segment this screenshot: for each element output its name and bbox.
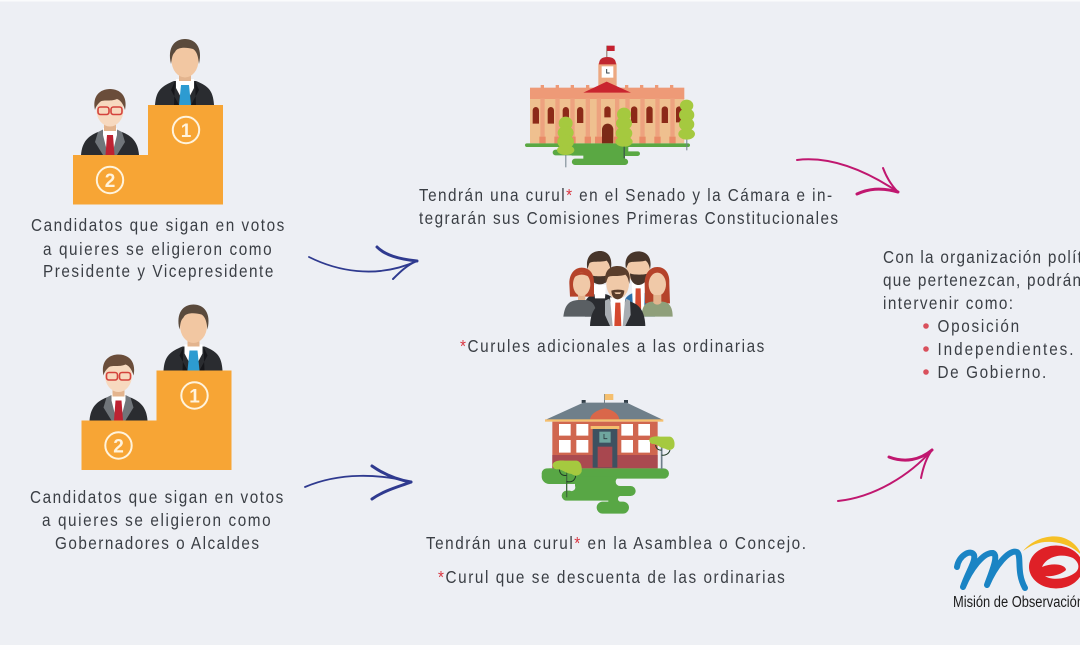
chimneys [582, 400, 628, 403]
windows [559, 424, 650, 453]
text: candidates president: Presidente y Vicepresidente [43, 261, 273, 281]
text: senate seat: tegrarán sus Comisiones Primeras Constitucionales [419, 208, 838, 228]
roof [545, 403, 663, 420]
text: candidates governors: Gobernadores o Alcaldes [55, 533, 259, 553]
tower [598, 63, 617, 87]
right woman [642, 267, 673, 317]
door [593, 428, 617, 468]
list: options: Oposición [938, 316, 1019, 336]
number 1: 1 [189, 386, 200, 408]
back right man [624, 251, 655, 317]
text: political organization: que pertenezcan, podrán [883, 270, 1080, 290]
text: candidates governors: Candidatos que sigan en votos [30, 487, 283, 507]
list: options [923, 316, 1074, 382]
podium group: governors and mayors [82, 304, 232, 470]
left woman [563, 268, 597, 317]
windows [533, 106, 682, 124]
pilasters [540, 98, 675, 137]
trees [557, 100, 695, 167]
flag [603, 394, 606, 409]
icon: school building [542, 394, 675, 514]
front man [590, 266, 645, 326]
walls [552, 422, 658, 468]
parapet [541, 85, 673, 88]
number 1: 1 [181, 121, 192, 142]
lawn [525, 143, 690, 165]
text: assembly seat: *Curul que se descuenta de las ordinarias [438, 567, 785, 587]
right tree [649, 436, 675, 469]
wall [530, 98, 684, 143]
text: candidates president: Candidatos que sigan en votos [31, 215, 284, 235]
text: candidates president: a quieres se eligieron como [43, 239, 272, 259]
text: assembly seat [426, 533, 806, 587]
logo: MOE [953, 536, 1080, 611]
icon: capitol building [525, 46, 695, 167]
back left man [585, 251, 615, 317]
text: candidates governors: a quieres se eligieron como [42, 510, 271, 530]
lawn [542, 468, 669, 514]
flag [605, 46, 608, 57]
text: senate seat [419, 185, 838, 228]
icon: group of people [563, 251, 673, 326]
text: assembly seat: Tendrán una curul* en la Asamblea o Concejo. [426, 533, 806, 553]
list: options: De Gobierno. [938, 362, 1046, 382]
logo mark [957, 536, 1080, 588]
arrow: magenta top [797, 159, 898, 194]
text: senate seat: Tendrán una curul* en el Senado y la Cámara e in- [419, 185, 832, 205]
arrow: blue bottom [305, 466, 411, 499]
text: political organization [883, 247, 1080, 382]
text: candidates president [31, 215, 284, 281]
text: political organization: intervenir como: [883, 293, 1013, 313]
list: options: Independientes. [938, 339, 1074, 359]
number 2: 2 [105, 171, 115, 192]
text: candidates governors [30, 487, 283, 553]
arrow: blue top [309, 247, 417, 279]
podium group: president and vice president [73, 39, 223, 204]
text: additional seats note: *Curules adicionales a las ordinarias [460, 336, 764, 356]
door [602, 124, 613, 143]
left tree [553, 460, 582, 497]
pediment [583, 82, 631, 93]
number 2: 2 [113, 436, 124, 458]
arrow: magenta bottom [838, 450, 932, 501]
